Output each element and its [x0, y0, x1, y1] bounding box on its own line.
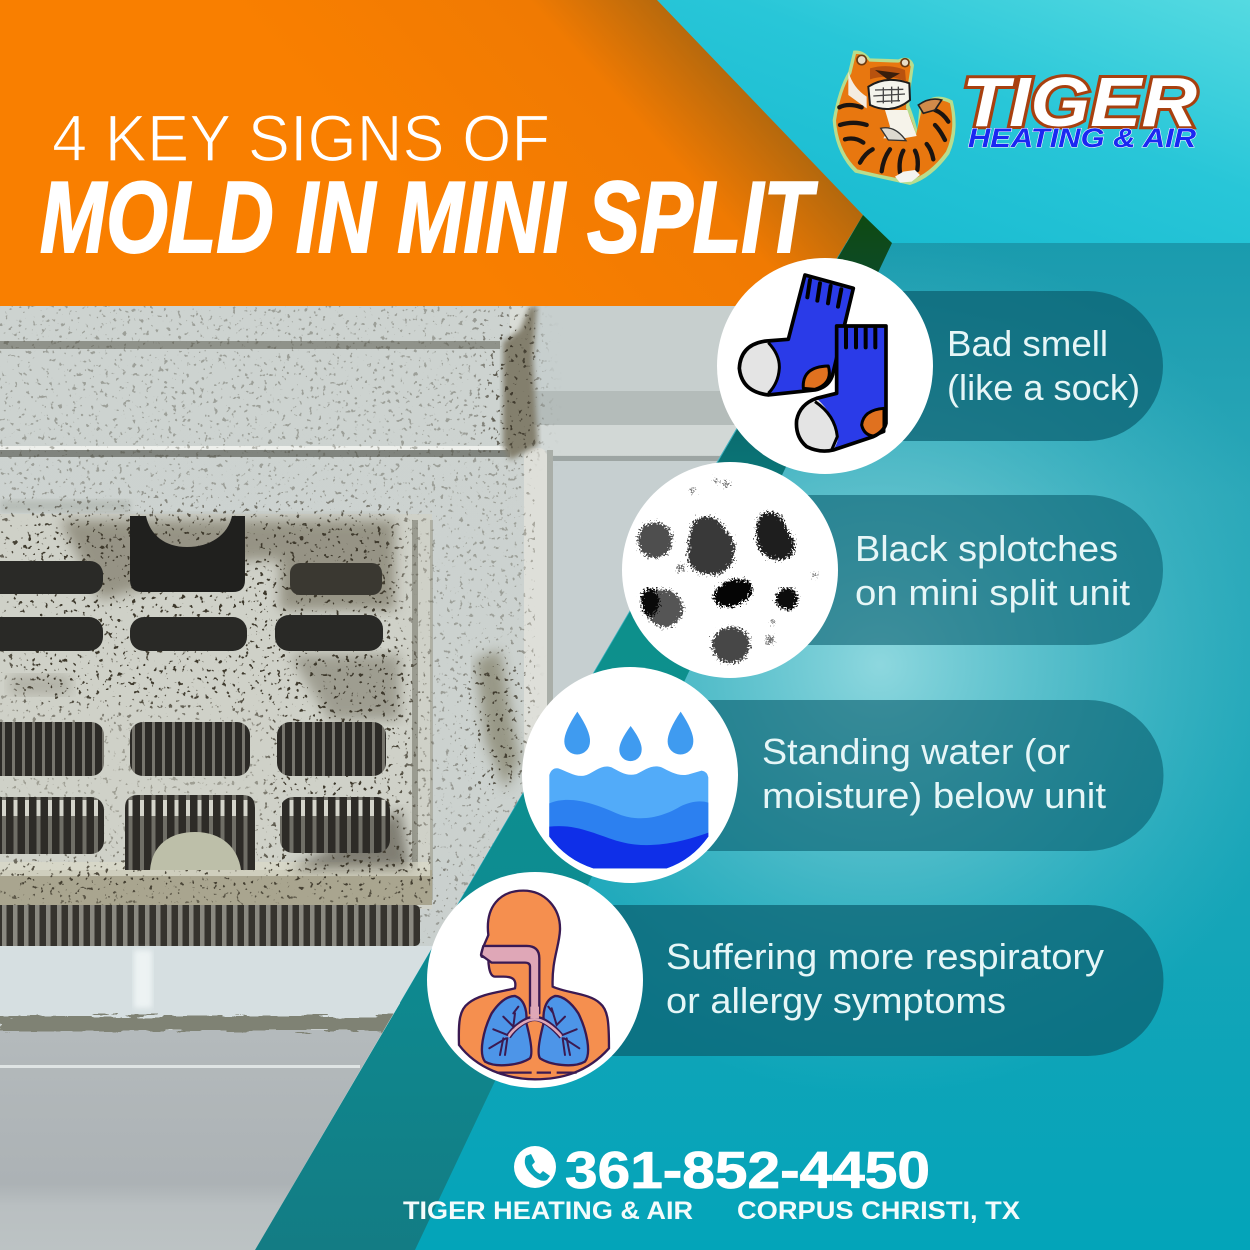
icon: phone — [514, 1146, 556, 1188]
text: standing water — [762, 731, 1106, 816]
icon: mold splotches — [638, 479, 817, 663]
sign 2: black splotches — [622, 462, 1163, 678]
company name: TIGER HEATING & AIR — [403, 1197, 693, 1225]
photo: bottom fin bar — [0, 905, 420, 946]
pill 2 — [730, 495, 1163, 645]
photo: right side panel — [510, 306, 736, 753]
text: respiratory symptoms: or allergy symptoms — [666, 980, 1006, 1021]
photo: lower white panel — [0, 946, 432, 1250]
photo: top ledge lines — [0, 306, 538, 460]
text: black splotches — [855, 528, 1130, 613]
text: respiratory symptoms: Suffering more respiratory — [666, 936, 1104, 977]
photo: moldy mini split unit — [0, 306, 736, 1250]
logo: Tiger Heating and Air — [833, 50, 1197, 185]
text: bad smell: Bad smell — [947, 323, 1108, 364]
title line one: 4 KEY SIGNS OF — [52, 101, 550, 175]
photo: grille surface — [0, 500, 520, 909]
photo: mold speckle overlay — [0, 306, 554, 944]
icon: socks — [739, 275, 886, 451]
pill 4 — [535, 905, 1164, 1056]
logo: TIGER wordmark: TIGER — [962, 63, 1197, 141]
circle 1 — [717, 258, 933, 474]
contact block — [403, 1142, 1020, 1225]
photo: slots row 2 — [0, 615, 383, 651]
logo: HEATING & AIR wordmark: HEATING & AIR — [968, 123, 1197, 153]
orange title banner — [0, 0, 863, 306]
icon: water — [549, 712, 708, 868]
title line two: MOLD IN MINI SPLIT — [40, 162, 818, 274]
logo: tiger mascot — [833, 50, 956, 185]
circle 3 — [522, 667, 738, 883]
icon: respiratory system — [459, 891, 609, 1079]
text: black splotches: Black splotches — [855, 528, 1118, 569]
photo: coil slots row 4 — [0, 795, 390, 870]
pill 1 — [825, 291, 1163, 441]
text: standing water: Standing water (or — [762, 731, 1070, 772]
location: CORPUS CHRISTI, TX — [737, 1197, 1020, 1225]
top right cyan background — [600, 0, 1250, 243]
pill 3 — [630, 700, 1164, 851]
text: respiratory symptoms — [666, 936, 1104, 1021]
lower teal background — [400, 243, 1250, 1250]
sign 4: respiratory symptoms — [427, 872, 1164, 1088]
photo: slots row 1 — [0, 516, 382, 595]
sign 3: standing water — [522, 667, 1164, 883]
text: bad smell — [947, 323, 1140, 408]
circle 2 — [622, 462, 838, 678]
text: black splotches: on mini split unit — [855, 572, 1130, 613]
text: standing water: moisture) below unit — [762, 775, 1106, 816]
text: bad smell: (like a sock) — [947, 367, 1140, 408]
sign 1: bad smell — [717, 258, 1163, 474]
dark teal diagonal strip — [255, 215, 892, 1250]
phone number: 361-852-4450 — [565, 1142, 930, 1200]
circle 4 — [427, 872, 643, 1088]
photo: coil slots row 3 — [0, 722, 386, 776]
